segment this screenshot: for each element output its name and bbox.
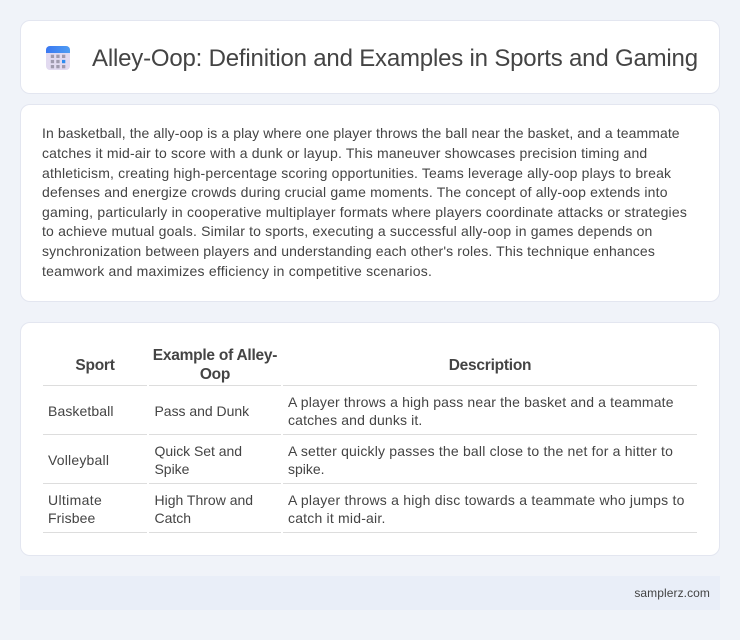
table header: Example of Alley- [153,347,277,364]
footer source: samplerz.com [634,586,710,600]
intro paragraph: catches it mid-air to score with a dunk or layup. This maneuver showcases precision timing and [42,145,647,161]
row: ultimate frisbee: Frisbee [48,510,95,526]
intro paragraph: gaming, particularly in cooperative multiplayer formats where players coordinate attacks or strategies [42,204,687,220]
row: volleyball: Volleyball [48,452,109,468]
row: volleyball [48,443,673,477]
row: basketball: Pass and Dunk [154,403,249,419]
row: volleyball: Spike [154,461,189,477]
table panel [20,322,720,556]
intro paragraph: to achieve mutual goals. Similar to sports, executing a successful ally-oop in games depends on [42,223,653,239]
header panel [20,20,720,94]
table header: Sport [75,357,115,374]
intro paragraph: synchronization between players and understanding each other's roles. This technique enhances [42,243,655,259]
row: volleyball: Quick Set and [154,443,242,459]
row: basketball: A player throws a high pass near the basket and a teammate [288,394,674,410]
intro paragraph: In basketball, the ally-oop is a play where one player throws the ball near the basket, and a teammate [42,125,680,141]
row: volleyball: A setter quickly passes the ball close to the net for a hitter to [288,443,673,459]
table header: Oop [200,366,230,382]
intro paragraph: athleticism, creating high-percentage scoring opportunities. Teams leverage ally-oop plays to break [42,165,671,181]
row: ultimate frisbee: Catch [154,510,191,526]
icon: calendar [46,46,70,70]
intro paragraph: teamwork and maximizes efficiency in competitive scenarios. [42,263,432,279]
intro paragraph: defenses and energize crowds during crucial game moments. The concept of ally-oop extends into [42,184,668,200]
row: ultimate frisbee: High Throw and [154,492,253,508]
row: volleyball: spike. [288,461,325,477]
table header [75,347,531,382]
row: basketball [48,394,674,428]
intro paragraph [42,125,687,279]
row: basketball: Basketball [48,403,114,419]
row: ultimate frisbee: catch it mid-air. [288,510,386,526]
title: Alley-Oop: Definition and Examples in Sports and Gaming [92,45,698,72]
table header: Description [449,357,531,374]
table [43,347,697,533]
row: ultimate frisbee: A player throws a high disc towards a teammate who jumps to [288,492,685,508]
intro text panel [20,104,720,302]
footer bar [20,576,720,610]
row: ultimate frisbee [48,492,685,526]
row: ultimate frisbee: Ultimate [48,492,102,508]
row: basketball: catches and dunks it. [288,412,422,428]
